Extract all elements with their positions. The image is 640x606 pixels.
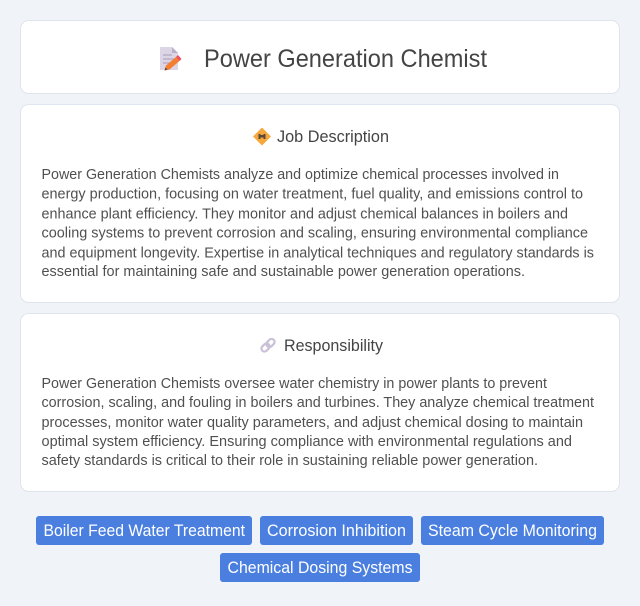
text block: job description: energy production, focusing on water treatment, fuel quality, and emissions control to — [42, 186, 583, 202]
text block: job description: cooling systems to prevent corrosion and scaling, ensuring environmental compliance — [42, 225, 588, 241]
text block: job description: enhance plant efficiency. They monitor and adjust chemical balances in boilers and — [42, 206, 568, 222]
icon: chain link — [260, 338, 276, 353]
tag: chemical dosing systems — [220, 553, 420, 582]
tag: boiler feed water treatment: Boiler Feed Water Treatment — [44, 522, 245, 540]
text block: responsibility: safety standards is critical to their role in sustaining reliable power generation. — [42, 453, 538, 469]
tags — [36, 516, 604, 582]
tag: corrosion inhibition: Corrosion Inhibition — [267, 522, 406, 540]
panel: job description — [20, 104, 620, 302]
icon: diamond sign — [254, 128, 270, 144]
text block: responsibility: corrosion, scaling, and fouling in boilers and turbines. They analyze chemical treatment — [42, 395, 594, 411]
tag: steam cycle monitoring — [421, 516, 604, 545]
text block: responsibility: optimal system efficiency. Ensuring compliance with environmental regulations and — [42, 434, 572, 450]
heading: job description: Job Description — [277, 128, 389, 146]
text block: job description: and equipment longevity. Expertise in analytical techniques and regulatory standards is — [42, 245, 594, 261]
panel: responsibility — [20, 314, 620, 492]
text block: job description: Power Generation Chemists analyze and optimize chemical processes involved in — [42, 167, 559, 183]
tag: steam cycle monitoring: Steam Cycle Monitoring — [428, 522, 597, 540]
tag: chemical dosing systems: Chemical Dosing Systems — [228, 559, 412, 577]
title: Power Generation Chemist — [204, 45, 487, 73]
tag: boiler feed water treatment — [36, 516, 252, 545]
text block: responsibility: processes, monitor water quality parameters, and adjust chemical dosing to maintain — [42, 415, 583, 431]
text block: job description: essential for maintaining safe and sustainable power generation operations. — [42, 264, 525, 280]
tag: corrosion inhibition — [260, 516, 413, 545]
text block: job description — [42, 167, 594, 280]
heading: responsibility: Responsibility — [284, 337, 384, 355]
text block: responsibility — [42, 376, 594, 469]
text block: responsibility: Power Generation Chemists oversee water chemistry in power plants to prevent — [42, 376, 547, 392]
panel: title card — [20, 20, 620, 94]
icon: document with pencil — [160, 47, 182, 70]
